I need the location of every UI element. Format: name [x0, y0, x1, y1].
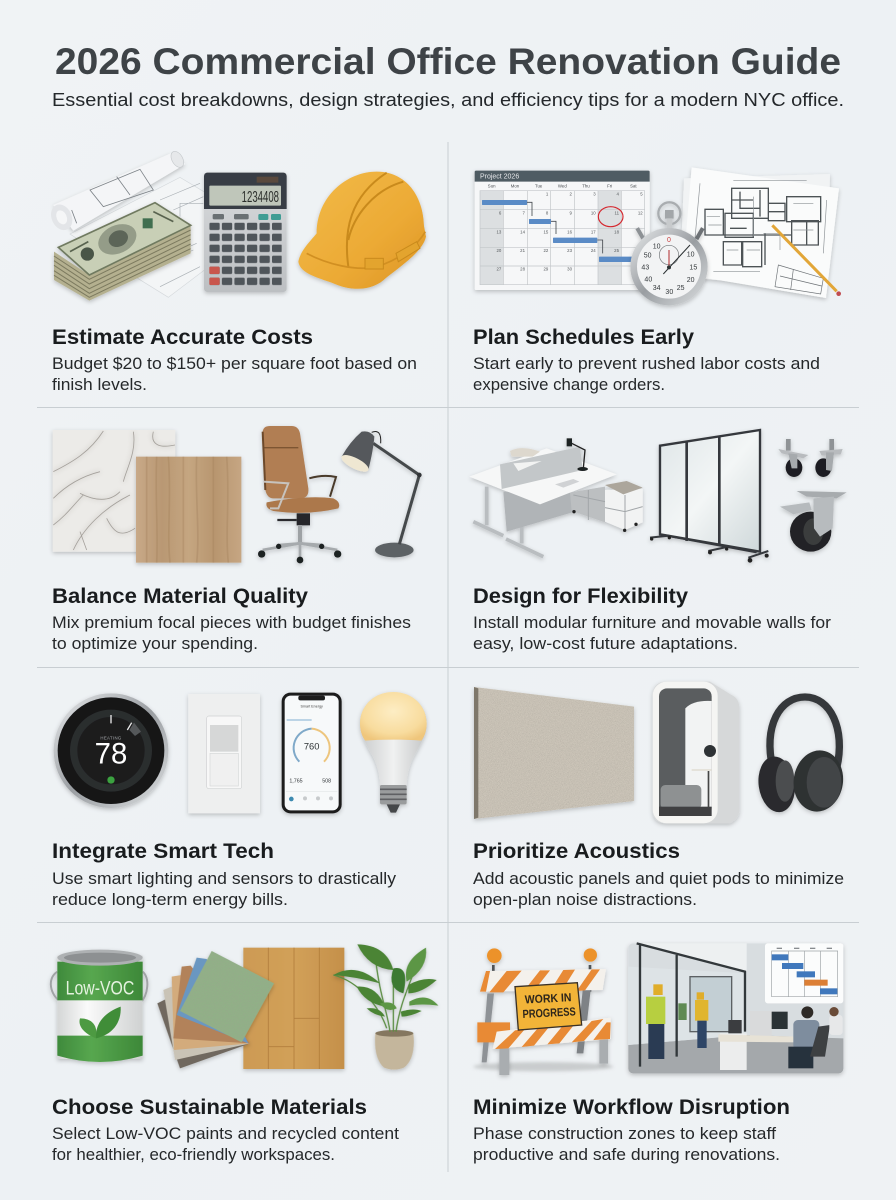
icon: calendar, stopwatch and floor plan: 24 — [591, 248, 596, 253]
heading: Integrate Smart Tech — [52, 839, 274, 863]
icon: calendar, stopwatch and floor plan: 8 — [546, 211, 549, 216]
icon: calendar, stopwatch and floor plan: Mon — [511, 184, 520, 189]
body text — [52, 354, 417, 394]
icon: calendar, stopwatch and floor plan: 40 — [644, 277, 652, 284]
panel: plan schedules early — [473, 167, 841, 394]
icon: thermostat, sensor, phone and bulb: 1,765 — [289, 779, 303, 785]
icon: acoustic panel, quiet pod and headphones — [474, 682, 847, 823]
body text — [52, 1124, 399, 1164]
icon: marble, wood, chair and lamp — [53, 426, 422, 563]
icon: calendar, stopwatch and floor plan: 3 — [593, 192, 596, 197]
icon: calendar, stopwatch and floor plan: 16 — [567, 229, 573, 234]
icon: calendar, stopwatch and floor plan: 27 — [497, 267, 502, 272]
icon: calendar, stopwatch and floor plan: Wed — [558, 184, 567, 189]
body text: for healthier, eco-friendly workspaces. — [52, 1145, 335, 1164]
icon: calendar, stopwatch and floor plan: Sun — [488, 184, 496, 189]
panel: estimate accurate costs — [47, 149, 426, 394]
body text: to optimize your spending. — [52, 634, 258, 653]
icon: calendar, stopwatch and floor plan: 17 — [591, 229, 596, 234]
icon: calendar, stopwatch and floor plan: 43 — [641, 264, 649, 271]
icon: calendar, stopwatch and floor plan — [475, 167, 841, 305]
icon: calendar, stopwatch and floor plan: 21 — [520, 248, 526, 253]
body text: finish levels. — [52, 375, 147, 394]
icon: calendar, stopwatch and floor plan: 15 — [689, 264, 697, 271]
icon: calendar, stopwatch and floor plan: 10 — [653, 243, 661, 250]
panel: prioritize acoustics — [473, 682, 847, 909]
icon: work-in-progress barricade and office photo with Gantt chart: PROGRESS — [522, 1005, 576, 1021]
icon: calendar, stopwatch and floor plan: 1 — [546, 192, 549, 197]
icon: calendar, stopwatch and floor plan: Fri — [607, 184, 612, 189]
title: 2026 Commercial Office Renovation Guide — [55, 41, 841, 82]
icon: calendar, stopwatch and floor plan: 14 — [520, 229, 526, 234]
icon: calendar, stopwatch and floor plan: 10 — [687, 252, 695, 259]
icon: work-in-progress barricade and office photo with Gantt chart: WORK IN — [525, 991, 572, 1007]
icon: calendar, stopwatch and floor plan: 23 — [567, 248, 573, 253]
heading: Balance Material Quality — [52, 584, 308, 608]
icon: calendar, stopwatch and floor plan: 2 — [570, 192, 573, 197]
icon: calendar, stopwatch and floor plan: 30 — [567, 267, 573, 272]
icon: low-VOC paint, flooring samples, bamboo and plant: Low-VOC — [66, 978, 134, 999]
panel: minimize workflow disruption — [473, 943, 843, 1164]
body text: Select Low-VOC paints and recycled content — [52, 1124, 399, 1143]
icon: calendar, stopwatch and floor plan: 13 — [497, 229, 502, 234]
icon: calendar, stopwatch and floor plan: 22 — [544, 248, 549, 253]
icon: calendar, stopwatch and floor plan: 7 — [523, 211, 526, 216]
icon: calendar, stopwatch and floor plan: 30 — [665, 289, 673, 296]
icon: calendar, stopwatch and floor plan: 0 — [667, 237, 671, 244]
heading: Plan Schedules Early — [473, 325, 694, 349]
body text: Install modular furniture and movable walls for — [473, 613, 831, 632]
icon: thermostat, sensor, phone and bulb — [54, 692, 427, 813]
icon: calendar, stopwatch and floor plan: 25 — [614, 248, 620, 253]
icon: calendar, stopwatch and floor plan: 34 — [653, 285, 661, 292]
body text — [473, 613, 831, 653]
body text: Start early to prevent rushed labor costs and — [473, 354, 820, 373]
icon: thermostat, sensor, phone and bulb: 760 — [304, 741, 319, 751]
body text — [473, 869, 844, 909]
icon: calendar, stopwatch and floor plan: 50 — [644, 252, 652, 259]
body text: open-plan noise distractions. — [473, 890, 697, 909]
icon: calendar, stopwatch and floor plan: Sat — [630, 184, 637, 189]
icon: calendar, stopwatch and floor plan: 29 — [544, 267, 549, 272]
body text: Phase construction zones to keep staff — [473, 1124, 776, 1143]
icon: calendar, stopwatch and floor plan: 12 — [638, 211, 643, 216]
heading: Choose Sustainable Materials — [52, 1095, 367, 1119]
icon: calendar, stopwatch and floor plan: 5 — [640, 192, 643, 197]
body text: expensive change orders. — [473, 375, 665, 394]
panel: balance material quality — [52, 426, 422, 653]
icon: calendar, stopwatch and floor plan: Project 2026 — [480, 174, 519, 181]
body text: Add acoustic panels and quiet pods to minimize — [473, 869, 844, 888]
icon: modular desk, movable wall and casters — [469, 430, 847, 563]
body text: Use smart lighting and sensors to drastically — [52, 869, 397, 888]
panel: choose sustainable materials — [51, 944, 438, 1164]
icon: low-VOC paint, flooring samples, bamboo and plant — [51, 944, 438, 1070]
icon: calendar, stopwatch and floor plan: 28 — [520, 267, 526, 272]
icon: calendar, stopwatch and floor plan: 4 — [617, 192, 620, 197]
icon: calendar, stopwatch and floor plan: 6 — [499, 211, 502, 216]
body text: easy, low-cost future adaptations. — [473, 634, 738, 653]
body text — [473, 354, 820, 394]
body text: Mix premium focal pieces with budget finishes — [52, 613, 411, 632]
heading: Estimate Accurate Costs — [52, 325, 313, 349]
icon: calendar, stopwatch and floor plan: 25 — [677, 285, 685, 292]
icon: calendar, stopwatch and floor plan: 11 — [614, 211, 620, 216]
icon: calendar, stopwatch and floor plan: 20 — [497, 248, 502, 253]
heading: Prioritize Acoustics — [473, 839, 680, 863]
body text: reduce long-term energy bills. — [52, 890, 288, 909]
icon: blueprints, cash, calculator and hard hat — [47, 149, 426, 301]
icon: thermostat, sensor, phone and bulb: HEATING — [100, 735, 122, 740]
heading: Minimize Workflow Disruption — [473, 1095, 790, 1119]
icon: thermostat, sensor, phone and bulb: 78 — [95, 737, 127, 770]
icon: calendar, stopwatch and floor plan: 10 — [591, 211, 596, 216]
icon: calendar, stopwatch and floor plan: 9 — [570, 211, 573, 216]
icon: blueprints, cash, calculator and hard hat: 1234408 — [242, 189, 279, 206]
heading: Design for Flexibility — [473, 584, 688, 608]
icon: thermostat, sensor, phone and bulb: 508 — [322, 779, 331, 785]
body text — [52, 869, 397, 909]
icon: calendar, stopwatch and floor plan: 18 — [614, 229, 620, 234]
icon: calendar, stopwatch and floor plan: Thu — [582, 184, 590, 189]
body text: Budget $20 to $150+ per square foot based on — [52, 354, 417, 373]
icon: calendar, stopwatch and floor plan: 15 — [544, 229, 549, 234]
body text — [473, 1124, 780, 1164]
icon: calendar, stopwatch and floor plan: 20 — [687, 277, 695, 284]
panel: design for flexibility — [469, 430, 847, 653]
subtitle: Essential cost breakdowns, design strategies, and efficiency tips for a modern NYC office. — [52, 89, 844, 110]
icon: calendar, stopwatch and floor plan: Tue — [535, 184, 543, 189]
panel: integrate smart tech — [52, 692, 427, 909]
icon: thermostat, sensor, phone and bulb: Smart Energy — [300, 705, 323, 709]
body text: productive and safe during renovations. — [473, 1145, 780, 1164]
body text — [52, 613, 411, 653]
icon: work-in-progress barricade and office photo with Gantt chart — [473, 943, 843, 1075]
